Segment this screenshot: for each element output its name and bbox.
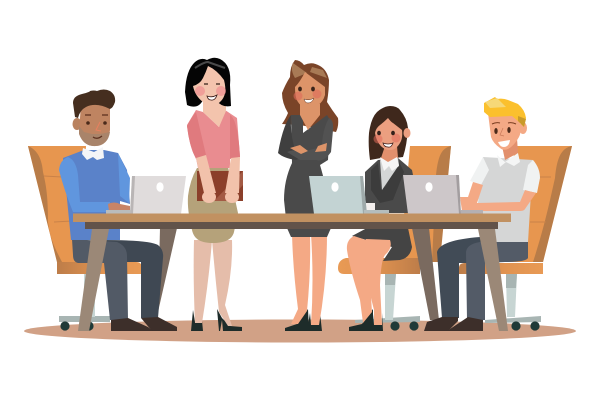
- face: [404, 128, 410, 138]
- legs: [347, 236, 372, 323]
- skirt: [352, 228, 412, 261]
- hair: [185, 58, 231, 107]
- laptop: left: [106, 176, 186, 214]
- blouse: [187, 110, 240, 168]
- shoes: [285, 309, 309, 331]
- neck: [203, 102, 226, 127]
- floor ellipse: [24, 320, 576, 342]
- laptop: right: [403, 175, 483, 214]
- vest: [478, 157, 533, 242]
- hands: [290, 145, 308, 154]
- table top: [73, 214, 511, 229]
- trousers: [437, 237, 485, 318]
- hair: [484, 97, 526, 127]
- dress: [284, 115, 331, 237]
- arms: [460, 182, 536, 211]
- shoes: [191, 310, 203, 331]
- laptop: centre: [309, 176, 389, 214]
- legs: [194, 240, 212, 323]
- neck and chest: [300, 104, 320, 130]
- shoes: [424, 317, 458, 331]
- person: man in blue sweater: [59, 90, 177, 331]
- jacket: [365, 158, 415, 213]
- person: man in grey vest: [424, 97, 540, 331]
- person: woman in pink blouse: [185, 58, 243, 331]
- shoes: [349, 309, 373, 331]
- neck: [381, 146, 398, 163]
- head: [519, 122, 527, 134]
- shoes: [141, 317, 177, 331]
- head: [72, 118, 82, 130]
- sleeves: [470, 157, 489, 185]
- table back legs: [158, 228, 439, 320]
- face: [295, 72, 325, 108]
- folder: [197, 171, 243, 201]
- skirt: [188, 167, 238, 243]
- face: [193, 66, 225, 106]
- chair: left: [28, 146, 142, 331]
- hair: [73, 90, 115, 118]
- hand: [366, 203, 375, 210]
- chair: right: [459, 146, 572, 331]
- collar: [497, 153, 520, 167]
- table front legs: [78, 229, 508, 331]
- sweater: [63, 150, 130, 240]
- chair: centre right: [338, 146, 451, 331]
- person: woman in dark jacket: [347, 106, 415, 331]
- hair: [282, 60, 338, 132]
- collar: [82, 147, 104, 160]
- trousers: [100, 240, 163, 318]
- blouse: [380, 158, 399, 190]
- hand: [108, 202, 130, 211]
- person: woman in grey dress: [278, 60, 338, 331]
- legs: [291, 234, 310, 324]
- hair: [369, 106, 408, 160]
- arms: [196, 155, 216, 193]
